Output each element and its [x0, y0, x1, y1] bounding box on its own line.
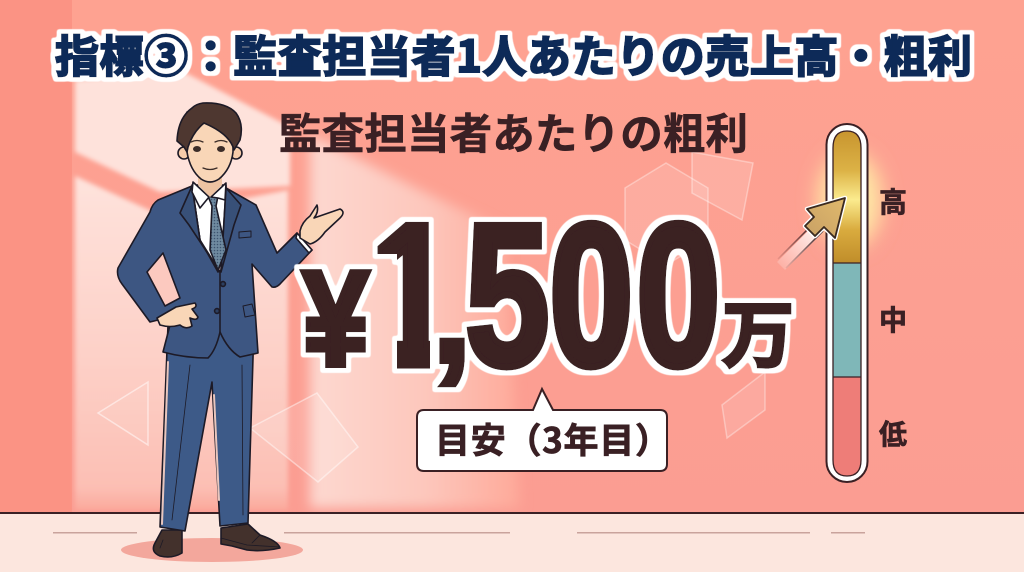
middle segment — [833, 263, 861, 377]
decorative lower shard — [722, 372, 765, 438]
breast pocket — [239, 231, 251, 238]
shoes — [153, 524, 280, 557]
hair — [177, 103, 241, 152]
hip pocket — [243, 304, 255, 317]
label middle: 中 — [879, 299, 907, 339]
callout: target label — [417, 389, 670, 471]
main figure: ¥1,500万 — [294, 214, 797, 392]
floor shadow — [121, 538, 303, 562]
main figure: ¥1,500万: 1 — [370, 183, 454, 409]
decorative triangle — [98, 382, 148, 445]
trousers — [160, 325, 254, 531]
label low: 低 — [879, 413, 907, 453]
ears — [178, 147, 190, 159]
main figure: ¥1,500万: 0 — [636, 183, 721, 409]
subtitle: 監査担当者あたりの粗利 — [279, 101, 748, 162]
title: 指標③：監査担当者1人あたりの売上高・粗利 — [55, 21, 972, 85]
eyebrows and mouth — [191, 140, 227, 170]
inner arm gap — [147, 253, 180, 306]
shirt — [192, 185, 228, 290]
window light: left lower pane — [75, 176, 288, 510]
collar — [192, 182, 226, 208]
eyes — [193, 146, 225, 152]
right cuff — [296, 233, 312, 253]
high segment — [833, 131, 861, 263]
jacket buttons — [221, 282, 225, 286]
neck — [198, 170, 222, 197]
main figure: ¥1,500万: 5 — [465, 183, 550, 409]
segment outline — [833, 131, 861, 476]
decorative tilted pane — [692, 152, 753, 220]
main figure: ¥1,500万: 万 — [722, 277, 794, 382]
window light: right pane — [310, 135, 520, 508]
decorative hexagon — [625, 163, 708, 265]
main figure: ¥1,500万: ¥ — [303, 243, 369, 394]
open hand — [300, 205, 343, 244]
face — [187, 112, 233, 182]
gauge glow — [818, 152, 882, 248]
gauge tube — [826, 124, 868, 482]
arrow pointing at high — [777, 198, 845, 270]
level gauge — [777, 124, 907, 482]
decorative diamond — [250, 393, 358, 482]
left hand on hip — [157, 303, 198, 328]
main figure: ¥1,500万: , — [431, 226, 473, 394]
jacket — [118, 186, 312, 358]
floor — [0, 512, 1024, 572]
callout: target label: 目安（3年目） — [435, 413, 670, 464]
low segment — [833, 377, 861, 476]
character: businessman in navy suit — [118, 103, 343, 562]
window light: left upper pane — [75, 72, 290, 192]
tie — [208, 196, 226, 270]
lapels — [180, 186, 241, 272]
main figure: ¥1,500万: 0 — [549, 183, 634, 409]
label high: 高 — [879, 181, 907, 221]
